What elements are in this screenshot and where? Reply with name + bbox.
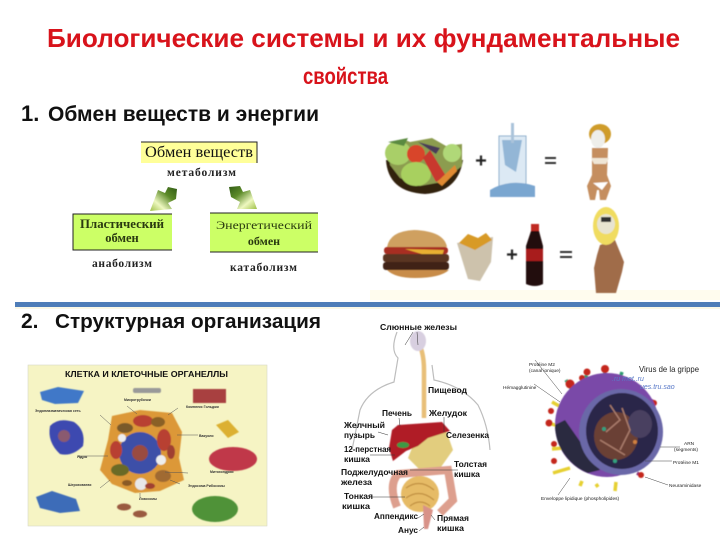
box: energy exchange: Энергетический bbox=[216, 218, 313, 232]
organelle labels: Митохондрии bbox=[210, 470, 234, 474]
heading 2: 2. bbox=[21, 310, 39, 333]
box: metabolism: Обмен веществ bbox=[145, 144, 253, 161]
label: metabolism: метаболизм bbox=[167, 167, 236, 179]
watermark text: ues.tru.sao bbox=[640, 384, 675, 391]
organ labels: кишка bbox=[454, 470, 481, 479]
envelope bbox=[555, 373, 659, 477]
salivary glands bbox=[410, 331, 426, 351]
icon: vegetable basket bbox=[385, 138, 463, 194]
virus title: Virus de la grippe bbox=[639, 364, 699, 374]
organ labels: Селезенка bbox=[446, 431, 490, 440]
pale strip above divider bbox=[370, 290, 720, 300]
gallbladder bbox=[397, 442, 409, 448]
box: plastic exchange bbox=[73, 214, 172, 250]
virus labels bbox=[503, 362, 702, 502]
cell illustration bbox=[100, 410, 184, 493]
title bbox=[47, 23, 680, 89]
icon: plus bbox=[507, 250, 517, 260]
stomach bbox=[408, 430, 453, 470]
icon: cola bottle bbox=[526, 224, 543, 286]
arrow: to catabolism bbox=[229, 186, 257, 209]
organelle labels: Эндоплазматическая сеть bbox=[35, 409, 81, 413]
organelle labels: Лизосомы bbox=[139, 497, 157, 501]
heading 2: Структурная организация bbox=[55, 311, 321, 333]
organ labels: Желудок bbox=[428, 409, 468, 418]
box: plastic exchange: Пластический bbox=[80, 217, 164, 231]
title: Биологические системы и их фундаментальные bbox=[47, 23, 680, 53]
organ labels: Пищевод bbox=[428, 386, 467, 395]
box: energy exchange bbox=[210, 213, 318, 252]
watermark text: .ru met..ru bbox=[612, 376, 644, 383]
organ labels: Толстая bbox=[454, 460, 487, 469]
arrow: to anabolism bbox=[150, 187, 177, 211]
cross-section rim bbox=[579, 389, 663, 475]
icon: slim figure bbox=[587, 124, 611, 200]
leader lines bbox=[78, 406, 198, 497]
virus labels: ARN bbox=[684, 441, 695, 447]
panel: healthy food equation bbox=[385, 123, 611, 200]
esophagus bbox=[416, 338, 424, 418]
organ labels: железа bbox=[340, 478, 373, 487]
divider bar bbox=[15, 302, 720, 309]
label: catabolism: катаболизм bbox=[230, 262, 297, 274]
body outline bbox=[352, 332, 490, 450]
organ labels: Аппендикс bbox=[374, 512, 419, 521]
virus labels: (canal ionique) bbox=[529, 368, 561, 374]
rectum bbox=[423, 505, 433, 529]
organ labels: кишка bbox=[437, 524, 465, 533]
panel: digestive system bbox=[340, 323, 490, 535]
organelle labels: Шероховатая bbox=[68, 483, 91, 487]
organelle labels: Комплекс Гольджи bbox=[186, 405, 219, 409]
virus labels: Hémagglutinine bbox=[503, 385, 537, 391]
leader lines bbox=[534, 360, 680, 495]
virus labels: (segments) bbox=[674, 447, 698, 453]
virus labels: Protéine M2 bbox=[529, 362, 555, 368]
organelle labels: Ядро bbox=[77, 454, 88, 459]
label: anabolism: анаболизм bbox=[92, 258, 152, 270]
spikes bbox=[548, 368, 654, 491]
icon: glass of water bbox=[490, 123, 535, 197]
organ labels: кишка bbox=[344, 455, 371, 464]
box: plastic exchange: обмен bbox=[105, 231, 139, 245]
panel: junk food equation bbox=[383, 207, 624, 293]
cross-section interior bbox=[586, 393, 658, 469]
icon: plus bbox=[476, 156, 486, 166]
organelle labels: Вакуоли bbox=[199, 434, 214, 438]
small intestine bbox=[401, 476, 439, 512]
organ labels: Анус bbox=[398, 526, 419, 535]
virus illustration bbox=[546, 365, 663, 491]
organ labels: пузырь bbox=[344, 431, 375, 440]
poster background bbox=[28, 365, 267, 526]
heading 1: 1. bbox=[21, 101, 39, 126]
organ labels: кишка bbox=[342, 502, 371, 511]
organ labels: Желчный bbox=[343, 421, 385, 430]
virus labels: Neuraminidase bbox=[669, 483, 702, 489]
icon: heavy figure bbox=[593, 207, 624, 293]
organ labels bbox=[340, 323, 490, 535]
organelle illustrations bbox=[36, 387, 257, 522]
large intestine bbox=[393, 470, 453, 513]
icon: fries bbox=[457, 233, 493, 281]
poster title: КЛЕТКА И КЛЕТОЧНЫЕ ОРГАНЕЛЛЫ bbox=[65, 370, 228, 379]
icon: equals bbox=[545, 158, 556, 163]
virus labels: Protéine M1 bbox=[673, 460, 699, 466]
organ labels: Прямая bbox=[437, 514, 469, 523]
watermark text bbox=[612, 376, 675, 391]
organ labels: Слюнные железы bbox=[380, 323, 457, 332]
heading 1: Обмен веществ и энергии bbox=[48, 103, 319, 126]
organ labels: Печень bbox=[382, 409, 412, 418]
organ labels: 12-перстная bbox=[344, 445, 391, 454]
icon: burger bbox=[383, 230, 449, 278]
organelle labels bbox=[35, 398, 234, 501]
leader lines bbox=[370, 332, 458, 531]
box: energy exchange: обмен bbox=[248, 234, 280, 248]
virus labels: Enveloppe lipidique (phospholipides) bbox=[541, 496, 620, 502]
organelle labels: Микротрубочки bbox=[124, 398, 151, 402]
title: свойства bbox=[303, 63, 388, 89]
panel: cell poster bbox=[28, 365, 267, 526]
spike tips bbox=[546, 365, 657, 478]
panel: metabolism diagram bbox=[73, 142, 318, 274]
organelle labels: Эндосома Рибосомы bbox=[188, 484, 225, 488]
organ labels: Поджелудочная bbox=[341, 468, 408, 477]
organs bbox=[389, 331, 453, 529]
organ labels: Тонкая bbox=[344, 492, 373, 501]
icon: equals bbox=[560, 252, 572, 257]
liver bbox=[389, 422, 450, 461]
panel: influenza virus bbox=[503, 360, 702, 502]
